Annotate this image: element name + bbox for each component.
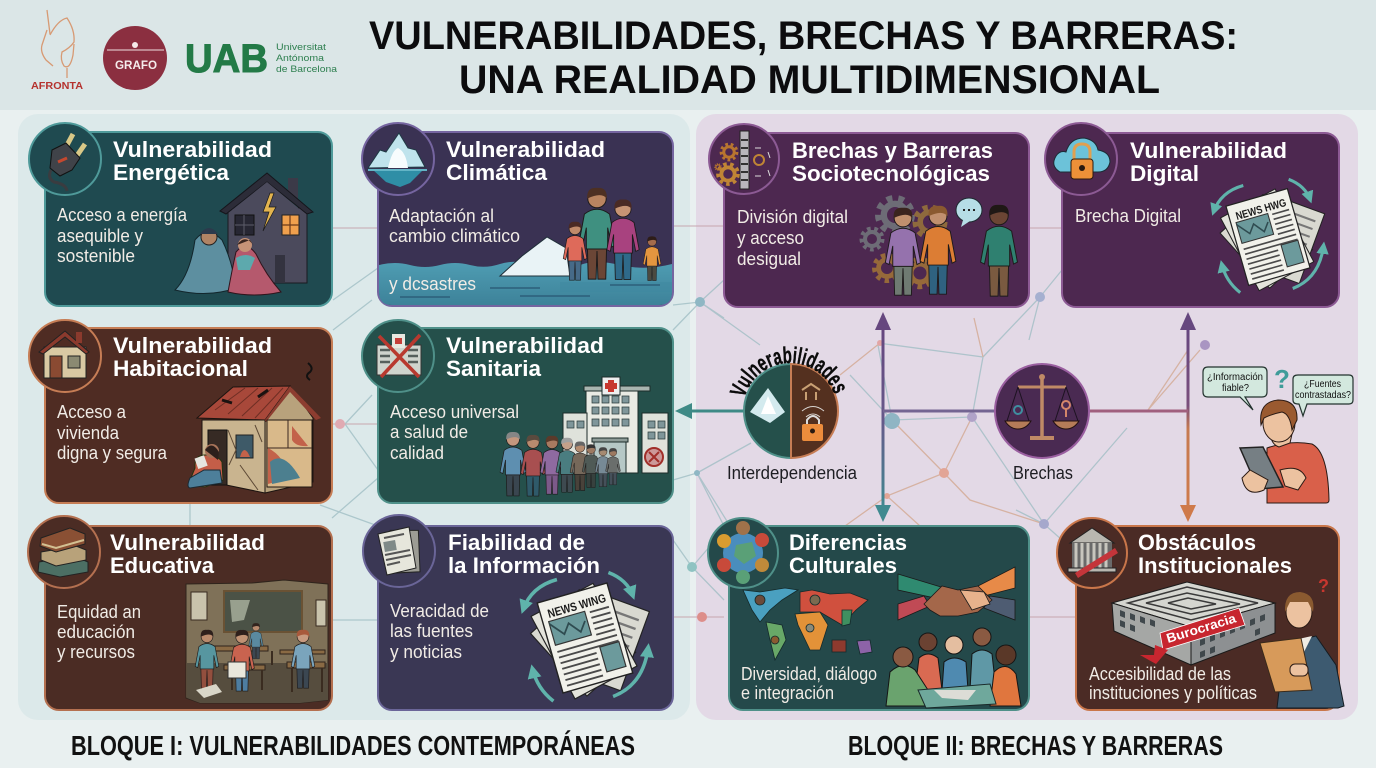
title: Vulnerabilidad [446,137,605,162]
block label: Bloque I: BLOQUE I: VULNERABILIDADES CONTEMPORÁNEAS [71,730,635,761]
text: Acceso universal [390,402,519,422]
title: Educativa [110,553,215,578]
panel: bloque II background [696,114,1358,720]
text: e integración [741,683,834,703]
card: Vulnerabilidad Habitacional [29,320,332,503]
figure [1240,400,1329,503]
illustration: bureaucracy maze building [1112,582,1275,665]
header band [0,0,1376,110]
text: sostenible [57,246,135,266]
icon: cloud lock [1045,123,1117,195]
speech bubble: ¿Fuentes contrastadas? [1293,375,1353,416]
title: VULNERABILIDADES, BRECHAS Y BARRERAS: [369,14,1238,58]
logo: GRAFO: GRAFO [115,58,157,72]
badge: two-colour circle [744,364,838,458]
text [1089,664,1257,703]
illustration: damaged house [188,363,321,493]
title: Vulnerabilidad [446,333,604,358]
label: Brechas [1013,463,1073,483]
title: Sanitaria [446,356,542,381]
text [390,601,489,662]
text: educación [57,622,135,642]
illustration: world map [743,588,872,660]
text [390,402,519,463]
panel: bloque I background [18,114,690,720]
logo: UAB: Universitat [276,42,326,53]
speech bubble: ¿Información fiable? [1203,367,1267,410]
card: Vulnerabilidad Climática [362,123,673,306]
arc heading: Vulnerabilidades [729,346,845,394]
text: instituciones y políticas [1089,683,1257,703]
icon: iceberg [362,123,434,195]
text [389,206,520,294]
badge: scales [995,364,1089,458]
title: Energética [113,160,230,185]
illustration: hospital and queue [500,377,668,496]
title: Brechas y Barreras [792,138,993,163]
title: Climática [446,160,548,185]
title: Habitacional [113,356,248,381]
text: asequible y [57,226,143,246]
text: las fuentes [390,621,473,641]
logo: UAB: Antónoma [276,53,325,64]
text: vivienda [57,423,120,443]
text [57,205,188,266]
text: Adaptación al [389,206,494,226]
title: Digital [1130,161,1199,186]
text: Accesibilidad de las [1089,664,1231,684]
illustration: handshake [898,567,1015,620]
title [789,530,907,578]
logo: AFRONTA: AFRONTA [31,80,83,92]
illustration: man with folder [1260,576,1344,708]
text: y acceso [737,228,804,248]
title [1138,530,1292,578]
title: Vulnerabilidad [113,137,272,162]
title: Sociotecnológicas [792,161,990,186]
title [110,530,265,578]
text [57,402,168,463]
central node: Interdependencia [727,346,858,483]
icon: cultures globe [708,518,778,588]
title [1130,138,1287,186]
speech bubble: ¿Fuentes contrastadas?: ¿Fuentes [1304,379,1341,390]
text: Equidad an [57,602,141,622]
logo: UAB: de Barcelona [276,64,338,75]
icon: crossed hospital [362,320,434,392]
illustration: cold house and couple [175,173,313,295]
text: Veracidad de [390,601,489,621]
text: Brecha Digital [1075,206,1181,226]
title: UNA REALIDAD MULTIDIMENSIONAL [459,58,1160,102]
text: a salud de [390,422,468,442]
title: Culturales [789,553,897,578]
card: Obstáculos Institucionales [1057,518,1344,710]
card: Vulnerabilidad Energética [29,123,332,306]
illustration: newspapers [523,572,649,701]
title [448,530,600,578]
text [737,207,848,269]
text: digna y segura [57,443,168,463]
icon: plug [29,123,101,195]
text: y recursos [57,642,135,662]
title: Institucionales [1138,553,1292,578]
text: División digital [737,207,848,227]
illustration: bureaucracy maze building: Burocracia [1164,610,1239,646]
speech bubble: ¿Información fiable?: fiable? [1222,383,1249,394]
text: desigual [737,249,801,269]
text: y dcsastres [389,274,476,294]
central node: Brechas [995,364,1089,483]
card: Vulnerabilidad Educativa [28,516,332,710]
question mark: ? [1274,364,1290,394]
block label: Bloque II: BLOQUE II: BRECHAS Y BARRERAS [848,730,1223,761]
text: cambio climático [389,226,520,246]
illustration: classroom [186,580,328,703]
text: Acceso a energía [57,205,188,225]
title [446,137,605,185]
card: Brechas y Barreras Sociotecnológicas [709,124,1029,307]
label: Interdependencia [727,463,858,483]
title [113,137,272,185]
card: Vulnerabilidad Digital [1045,123,1339,307]
logo: GRAFO [103,26,167,90]
icon: house [29,320,101,392]
connector arrows [675,312,1196,522]
text: Diversidad, diálogo [741,664,877,684]
illustration: family and iceberg [400,188,672,297]
icon: institution [1057,518,1127,588]
illustration: newspapers: NEWS HWG [1235,197,1288,223]
illustration: man with folder: ? [1318,576,1329,596]
title [369,14,1238,102]
card: Diferencias Culturales [708,518,1029,710]
person with tablet and questions [1203,364,1353,503]
title [113,333,272,381]
illustration: group around table [886,628,1021,708]
text: y noticias [390,642,462,662]
logo: AFRONTA [31,10,83,92]
title: Obstáculos [1138,530,1256,555]
text: Acceso a [57,402,127,422]
illustration: newspapers: NEWS WING [546,591,608,621]
icon: books [28,516,100,588]
title [792,138,993,186]
icon: gears and circuit [709,124,779,194]
card: Fiabilidad de la Información [363,515,673,710]
title: Diferencias [789,530,907,555]
text [57,602,141,662]
speech bubble: ¿Información fiable?: ¿Información [1207,372,1263,383]
title: Vulnerabilidad [1130,138,1287,163]
network background [190,226,1200,620]
speech bubble: ¿Fuentes contrastadas?: contrastadas? [1295,390,1351,401]
illustration: newspapers [1213,179,1325,293]
water [379,262,672,305]
title: Fiabilidad de [448,530,585,555]
title: la Información [448,553,600,578]
icon: newspaper [363,515,435,587]
text [741,664,877,703]
text: calidad [390,443,444,463]
network nodes [335,292,1210,622]
logo: UAB: UAB [185,37,268,81]
title: Vulnerabilidad [110,530,265,555]
title: Vulnerabilidad [113,333,272,358]
title [446,333,604,381]
card: Vulnerabilidad Sanitaria [362,320,673,503]
illustration: people with gears [862,198,1017,296]
logo: UAB [185,37,338,81]
